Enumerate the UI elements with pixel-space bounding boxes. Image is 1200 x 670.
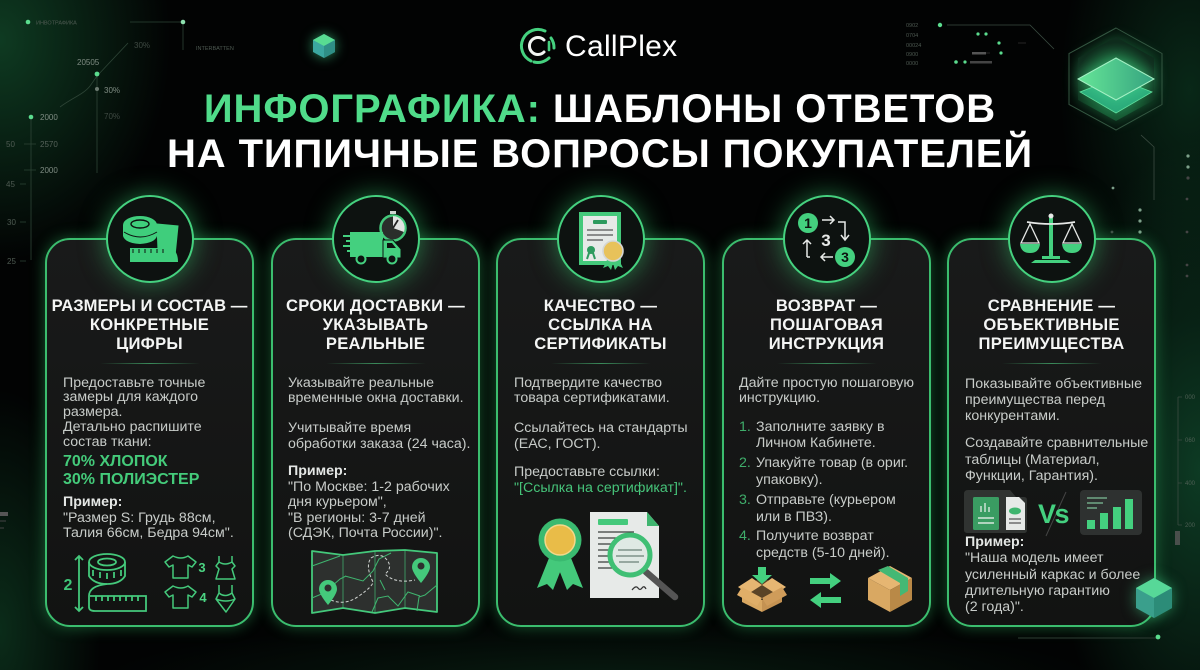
bottom right accent line [1018, 635, 1160, 639]
text: description: Детально распишите [63, 419, 202, 435]
step 2: Упакуйте товар (в ориг. [756, 455, 908, 471]
chart labels: top left [6, 20, 234, 266]
step 1 [739, 419, 884, 451]
panel: comparison [938, 180, 1180, 636]
chart labels: top left: INTERBATTEN [196, 46, 234, 52]
heading [534, 296, 667, 353]
logo wordmark: CallPlex [565, 30, 677, 63]
text: links: "[Ссылка на сертификат]". [514, 480, 687, 496]
text: links [514, 464, 687, 496]
text: windows [288, 374, 464, 406]
chart labels: top left: ИНВОТРАФИКА [36, 20, 77, 26]
card 1 icons [64, 216, 236, 613]
icon: open box [737, 567, 787, 612]
panel: returns: 2. [739, 455, 751, 471]
icon: fast truck with stopwatch [343, 211, 406, 264]
chart labels: top left: 30 [7, 218, 16, 227]
step 3: или в ПВЗ). [756, 508, 832, 524]
step 3 [739, 492, 896, 524]
panel: delivery times [262, 180, 489, 636]
text: description [63, 374, 205, 450]
text: example: "В регионы: 3-7 дней [288, 510, 426, 526]
panel: returns: 1. [739, 419, 751, 435]
icon: certificate with seal [579, 212, 623, 270]
heading: УКАЗЫВАТЬ [323, 315, 428, 334]
text: composition: 70% ХЛОПОК [63, 453, 168, 470]
decorative data overlays: 060 [1185, 438, 1196, 444]
step 1: Личном Кабинете. [756, 435, 876, 451]
text: example: Талия 66см, Бедра 94см". [63, 525, 234, 541]
heading: ИНСТРУКЦИЯ [769, 334, 884, 353]
text: processing [288, 420, 470, 452]
text: windows: Указывайте реальные [288, 374, 434, 390]
icon: clothing sizes [165, 556, 235, 612]
panel: quality [487, 180, 714, 636]
text: advantages [965, 376, 1142, 424]
step 1: Заполните заявку в [756, 419, 884, 435]
circuit lines top right [947, 25, 1182, 525]
icon: cube accent [1136, 578, 1172, 618]
panel: returns: 3. [739, 492, 751, 508]
text: example: Пример: [288, 463, 347, 479]
heading: РЕАЛЬНЫЕ [326, 334, 425, 353]
step 3: Отправьте (курьером [756, 492, 896, 508]
decorative data overlays: 200 [1185, 523, 1196, 529]
chart labels: top left: 25 [7, 257, 16, 266]
text: description: Предоставьте точные [63, 374, 205, 390]
icon: scales [1020, 214, 1082, 263]
step 4 [739, 528, 890, 560]
text: example: "Наша модель имеет [965, 550, 1104, 566]
icon: rosette [537, 518, 583, 590]
heading: СЕРТИФИКАТЫ [534, 334, 667, 353]
text: intro: Дайте простую пошаговую [739, 374, 914, 390]
heading [286, 296, 465, 353]
text: tables: Создавайте сравнительные [965, 435, 1148, 451]
chart labels: top left: 20505 [77, 58, 100, 67]
heading [979, 296, 1124, 353]
icon: small cube top [313, 34, 335, 58]
text: composition [63, 453, 199, 488]
heading: ВОЗВРАТ — [776, 296, 877, 315]
chart labels: top left: 50 [6, 140, 15, 149]
text: example: длительную гарантию [965, 583, 1110, 599]
text: links: Предоставьте ссылки: [514, 464, 660, 480]
text: advantages: преимущества перед [965, 392, 1105, 408]
label: 2: 2 [64, 577, 73, 594]
logo [520, 28, 556, 64]
icon: measuring tape in circle [123, 216, 178, 262]
text: example: "Размер S: Грудь 88см, [63, 510, 216, 526]
text: tables [965, 435, 1148, 484]
icon: hexagon with layers [1069, 28, 1162, 130]
chart traces: top left [20, 20, 185, 261]
text: confirm quality: товара сертификатами. [514, 390, 670, 406]
data list top right: 00024 [906, 43, 921, 49]
title line 1: ИНФОГРАФИКА: ШАБЛОНЫ ОТВЕТОВ [204, 87, 996, 131]
chart labels: top left: 2570 [40, 140, 58, 149]
step 4: Получите возврат [756, 528, 874, 544]
icon: versus: Vs [1038, 499, 1069, 529]
heading: СРОКИ ДОСТАВКИ — [286, 296, 465, 315]
text: processing: Учитывайте время [288, 420, 411, 436]
chart labels: top left: 45 [6, 180, 15, 189]
heading: КОНКРЕТНЫЕ [90, 315, 209, 334]
panel: sizes and composition [36, 180, 263, 636]
icon: closed box [868, 566, 912, 612]
icon: step cycle: 3 [841, 249, 849, 265]
heading: ПРЕИМУЩЕСТВА [979, 334, 1124, 353]
icon: spreadsheets [964, 490, 1027, 533]
text: intro [739, 374, 914, 406]
text: advantages: конкурентами. [965, 408, 1060, 424]
data list top right: 0704 [906, 33, 918, 39]
heading: РАЗМЕРЫ И СОСТАВ — [52, 296, 247, 315]
text: example: Пример: [965, 534, 1024, 550]
heading: ЦИФРЫ [116, 334, 183, 353]
heading: ССЫЛКА НА [548, 315, 653, 334]
heading [769, 296, 884, 353]
data list top right: 0902 [906, 23, 918, 29]
labels: 3 and 4: 4 [199, 590, 207, 605]
text: tables: таблицы (Материал, [965, 452, 1100, 468]
heading: КАЧЕСТВО — [544, 296, 657, 315]
text: standards: Ссылайтесь на стандарты [514, 420, 688, 436]
text: advantages: Показывайте объективные [965, 376, 1142, 392]
chart labels: top left: 2000 [40, 166, 58, 175]
text: example: дня курьером", [288, 494, 387, 510]
text: standards [514, 420, 688, 452]
step 4: средств (5-10 дней). [756, 544, 890, 560]
heading [52, 296, 248, 353]
text: example [288, 463, 450, 541]
step 2 [739, 455, 908, 488]
text: intro: инструкцию. [739, 390, 820, 406]
chart labels: top left: 70% [104, 112, 120, 121]
panel: returns: 4. [739, 528, 751, 544]
labels: 3 and 4: 3 [198, 560, 206, 575]
icon: map with route [312, 550, 437, 613]
data list top right [906, 23, 921, 67]
text: example: (СДЭК, Почта России)". [288, 525, 442, 541]
icon: exchange arrows [810, 573, 841, 608]
data list top right: 0000 [906, 61, 918, 67]
text: confirm quality [514, 374, 670, 406]
icon: versus [1038, 492, 1069, 536]
text: standards: (ЕАС, ГОСТ). [514, 436, 600, 452]
icon: step cycle [798, 213, 855, 267]
chart labels: top left: 30% [104, 86, 120, 95]
chart labels: top left: 2000 [40, 113, 58, 122]
icon: document with magnifier [590, 512, 675, 598]
labels: 3 and 4 [198, 560, 207, 605]
icon: logo mark [520, 28, 556, 64]
text: composition: 30% ПОЛИЭСТЕР [63, 470, 199, 488]
text: description: состав ткани: [63, 434, 152, 450]
decorative data overlays: 400 [1185, 481, 1196, 487]
step 2: упаковку). [756, 472, 823, 488]
icon: step cycle: 1 [804, 215, 812, 231]
heading: ОБЪЕКТИВНЫЕ [983, 315, 1120, 334]
text: description: размера. [63, 404, 122, 420]
text: example [63, 494, 234, 541]
text: example: усиленный каркас и более [965, 567, 1140, 583]
text: confirm quality: Подтвердите качество [514, 374, 662, 390]
text: processing: обработки заказа (24 часа). [288, 436, 470, 452]
panel: returns [713, 180, 940, 636]
heading: СРАВНЕНИЕ — [988, 296, 1115, 315]
title line 2: НА ТИПИЧНЫЕ ВОПРОСЫ ПОКУПАТЕЛЕЙ [167, 132, 1033, 176]
text: example: (2 года)". [965, 599, 1024, 615]
decorative data overlays: 000 [1185, 395, 1196, 401]
icon: height arrow with tape [75, 554, 146, 611]
text: example: Пример: [63, 494, 122, 510]
text: windows: временные окна доставки. [288, 390, 464, 406]
icon: step cycle: 3 [821, 231, 831, 250]
chart labels: top left: 30% [134, 41, 150, 50]
heading: ПОШАГОВАЯ [770, 315, 883, 334]
icon: bar chart tile [1080, 490, 1142, 535]
text: description: замеры для каждого [63, 389, 198, 405]
text: example [965, 534, 1140, 615]
text: tables: Функции, Гарантия). [965, 468, 1098, 484]
text: example: "По Москве: 1-2 рабочих [288, 479, 450, 495]
data list top right: 0900 [906, 52, 918, 58]
